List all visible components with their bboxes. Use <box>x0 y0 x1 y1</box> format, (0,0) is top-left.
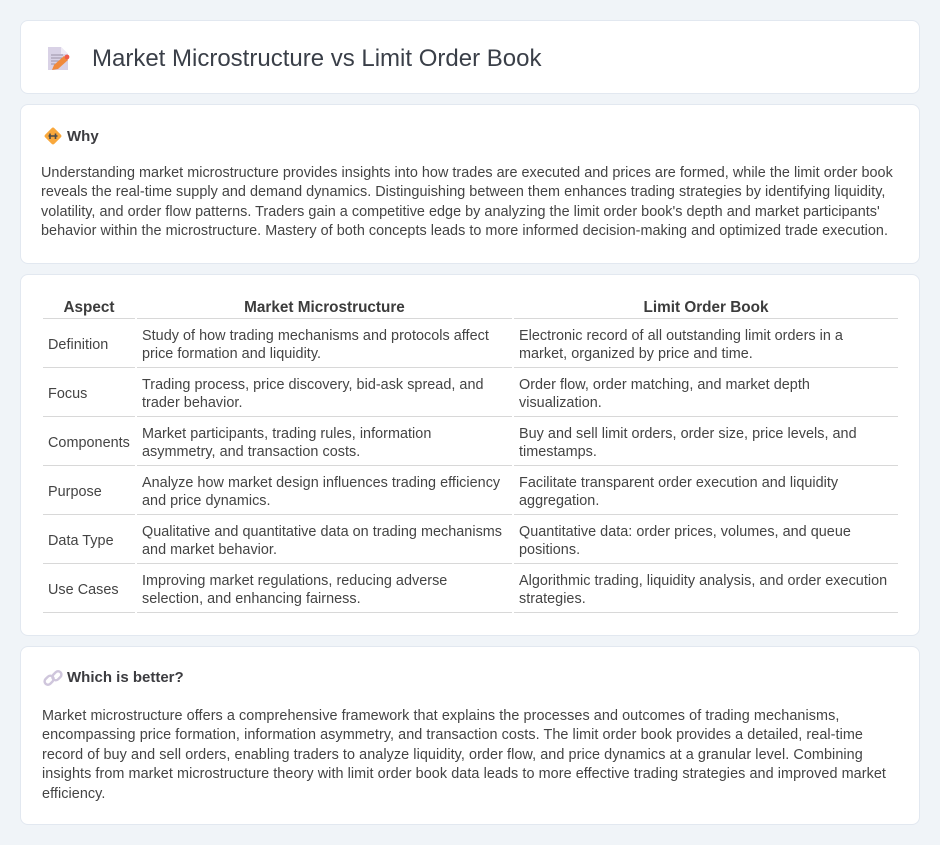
row: components: timestamps. <box>519 444 597 460</box>
row: purpose: Analyze how market design influences trading efficiency <box>142 475 500 491</box>
table header: Limit Order Book <box>644 299 768 316</box>
table header: Market Microstructure <box>244 299 405 316</box>
row: purpose: aggregation. <box>519 493 599 509</box>
row: use cases: Algorithmic trading, liquidity analysis, and order execution <box>519 573 887 589</box>
text block: why: reveals the real-time supply and demand dynamics. Distinguishing between them enhances trading strategies by identifying liquidity, <box>41 184 885 200</box>
text block: which is better: insights from market microstructure theory with limit order book data leads to more effective trading strategies and improved market <box>42 766 886 782</box>
row: data type: and market behavior. <box>142 542 277 558</box>
row: components: Market participants, trading rules, information <box>142 426 431 442</box>
header card <box>20 20 920 94</box>
heading: why: Why <box>67 128 99 145</box>
text block: why: Understanding market microstructure provides insights into how trades are executed and prices are formed, while the limit order book <box>41 165 893 181</box>
text block: which is better: Market microstructure offers a comprehensive framework that explains the processes and outcomes of trading mechanisms, <box>42 708 839 724</box>
row: definition: price formation and liquidity. <box>142 346 321 362</box>
table header: Aspect <box>63 299 114 316</box>
text block: why: behavior within the microstructure. Mastery of both concepts leads to more informed decision-making and optimized trade execution. <box>41 223 888 239</box>
text block: which is better: efficiency. <box>42 786 105 802</box>
row: purpose: and price dynamics. <box>142 493 271 509</box>
row: definition: Electronic record of all outstanding limit orders in a <box>519 328 843 344</box>
table header <box>63 299 768 316</box>
row: focus: Focus <box>48 386 87 402</box>
row: use cases: selection, and enhancing fairness. <box>142 591 361 607</box>
row: use cases <box>48 573 887 607</box>
row: data type: Data Type <box>48 533 114 549</box>
row: definition <box>48 328 843 362</box>
panel: why <box>20 104 920 264</box>
title: Market Microstructure vs Limit Order Book <box>92 45 541 72</box>
panel: which is better <box>20 646 920 825</box>
row: focus: trader behavior. <box>142 395 242 411</box>
text block: which is better: record of buy and sell orders, enabling traders to analyze liquidity, order flow, and price dynamics at a granular level. Combining <box>42 747 863 763</box>
row: definition: market, organized by price and time. <box>519 346 753 362</box>
text block: which is better: encompassing price formation, information asymmetry, and transaction costs. The limit order book provides a detailed, real-time <box>42 727 863 743</box>
row: purpose: Purpose <box>48 484 102 500</box>
icon: warning diamond <box>44 128 62 144</box>
row: purpose: Facilitate transparent order execution and liquidity <box>519 475 838 491</box>
row: data type: positions. <box>519 542 580 558</box>
row: data type: Quantitative data: order prices, volumes, and queue <box>519 524 851 540</box>
row: definition: Definition <box>48 337 108 353</box>
text block: why: volatility, and order flow patterns. Traders gain a competitive edge by analyzing the limit order book's depth and market participants' <box>41 204 880 220</box>
row: focus: visualization. <box>519 395 602 411</box>
row: focus <box>48 377 810 411</box>
row: use cases: Improving market regulations, reducing adverse <box>142 573 447 589</box>
row: data type <box>48 524 851 558</box>
row: use cases: strategies. <box>519 591 586 607</box>
text block: why <box>41 165 893 239</box>
row: focus: Order flow, order matching, and market depth <box>519 377 810 393</box>
panel: comparison table <box>20 274 920 636</box>
row: components: Buy and sell limit orders, order size, price levels, and <box>519 426 857 442</box>
icon: document with pencil <box>48 47 70 70</box>
row: definition: Study of how trading mechanisms and protocols affect <box>142 328 489 344</box>
heading: which is better: Which is better? <box>67 669 184 686</box>
row: components: asymmetry, and transaction costs. <box>142 444 360 460</box>
row: focus: Trading process, price discovery, bid-ask spread, and <box>142 377 484 393</box>
text block: which is better <box>42 708 886 802</box>
icon: link <box>43 670 63 686</box>
row: data type: Qualitative and quantitative data on trading mechanisms <box>142 524 502 540</box>
row: purpose <box>48 475 838 509</box>
row: components <box>48 426 857 460</box>
row: use cases: Use Cases <box>48 582 119 598</box>
row: components: Components <box>48 435 130 451</box>
